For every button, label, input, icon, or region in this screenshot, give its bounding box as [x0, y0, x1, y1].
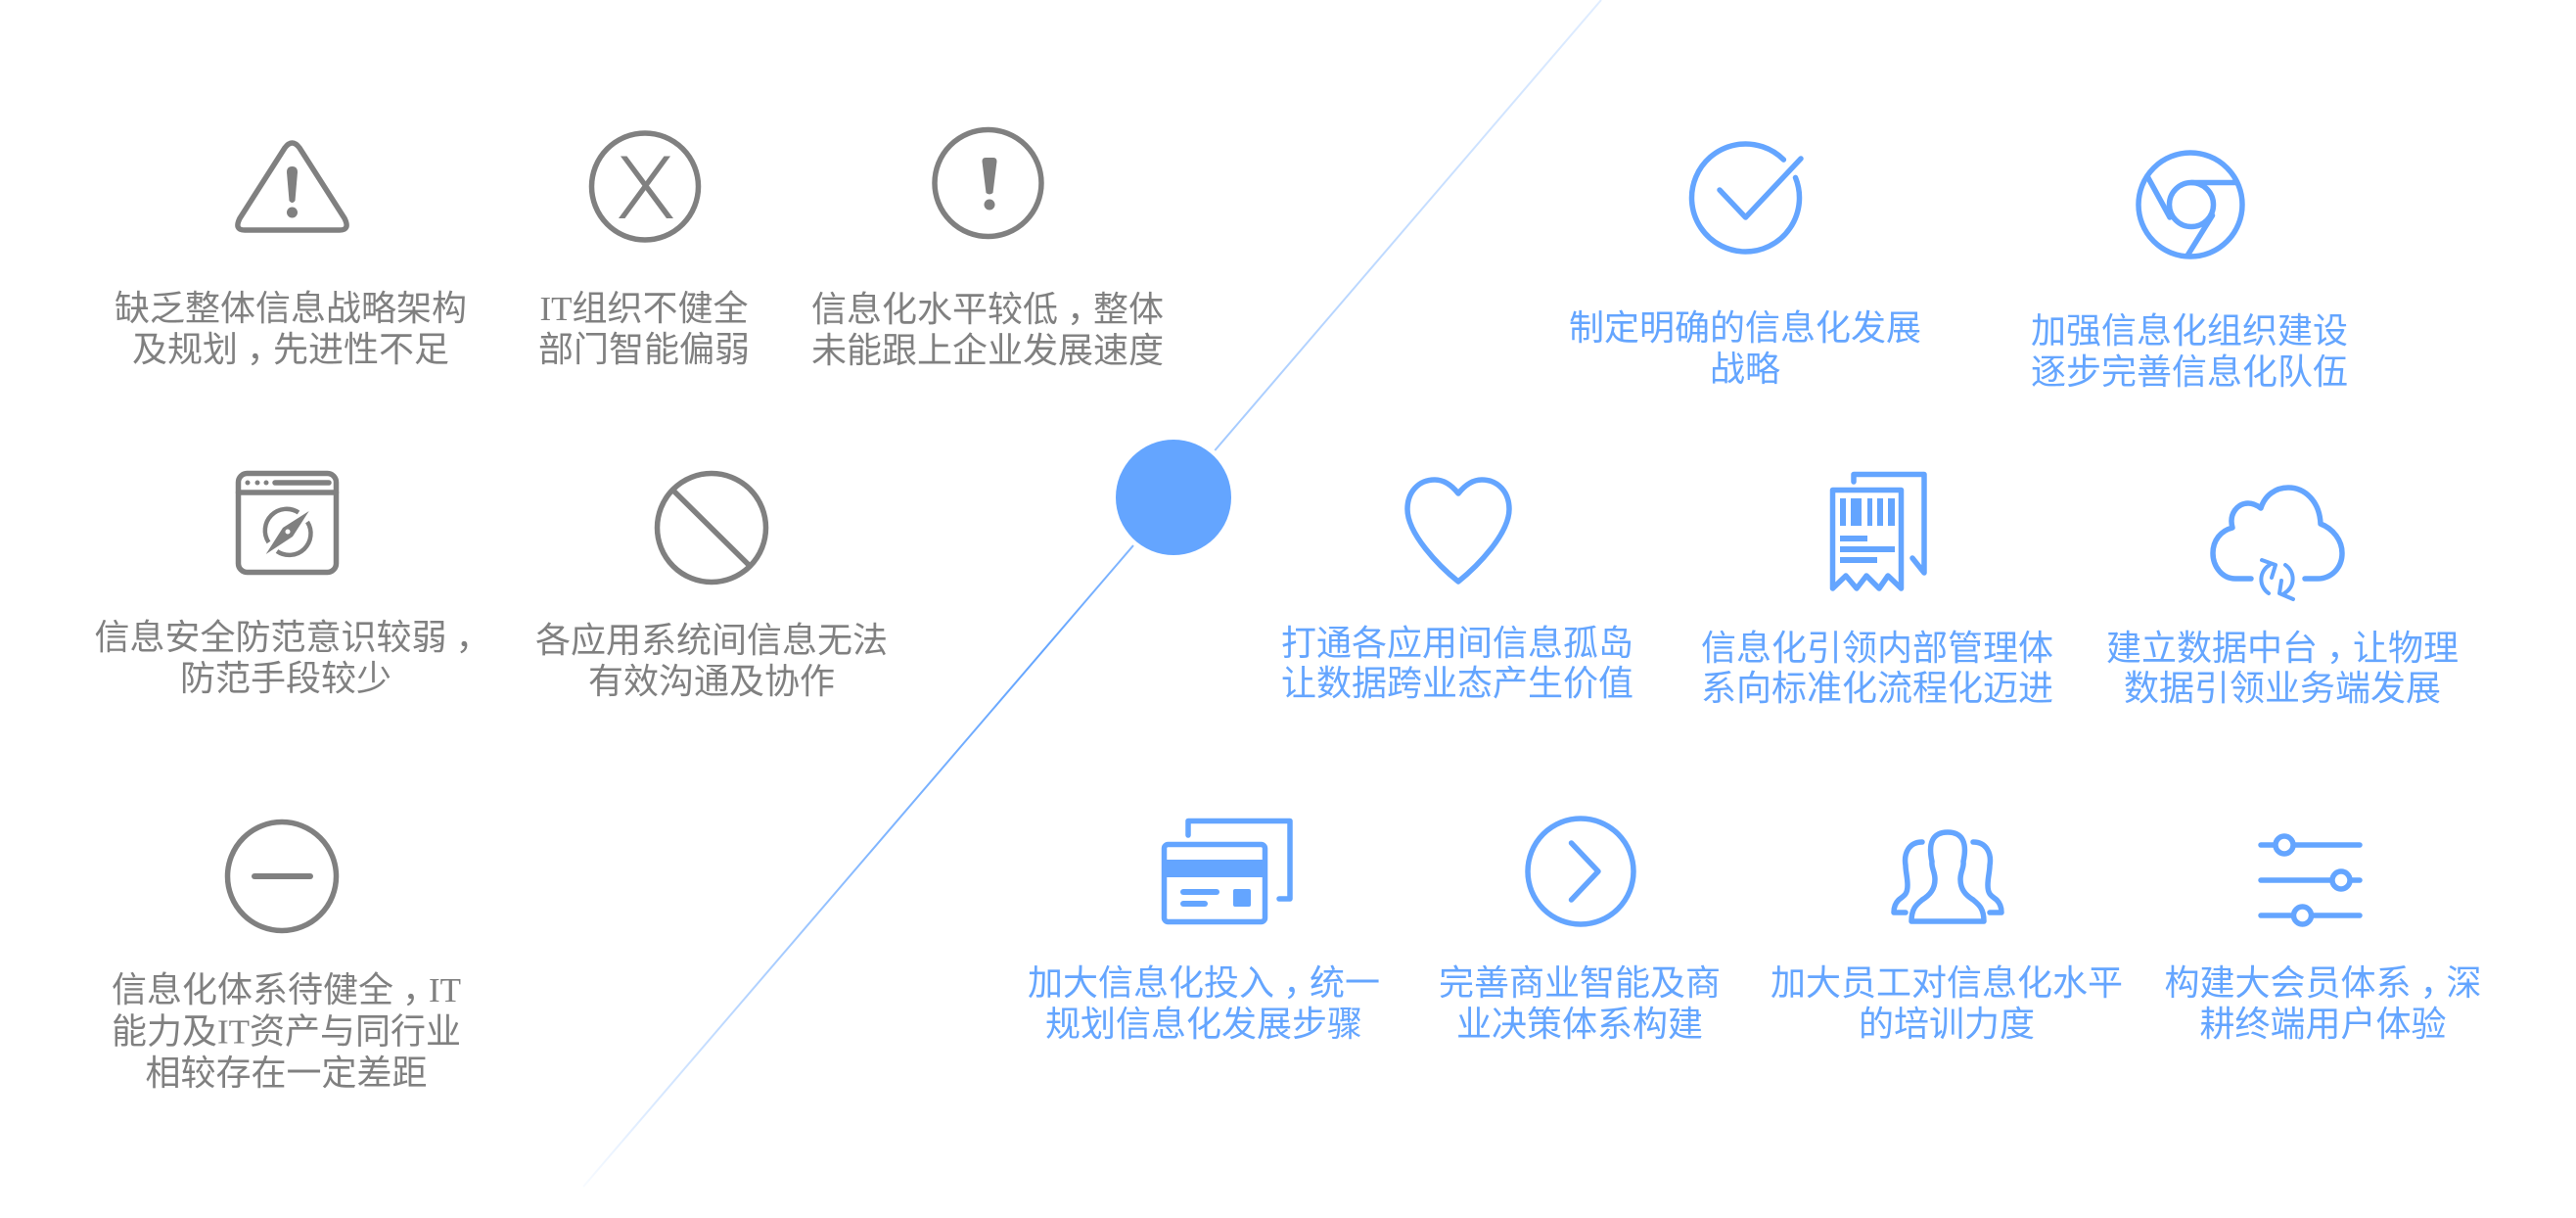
item: business intelligence [1439, 819, 1721, 1044]
icon: chrome-style ring [2139, 153, 2242, 257]
item: development strategy [1569, 144, 1921, 389]
item: investment [1028, 820, 1380, 1044]
item: organization building [2031, 153, 2348, 392]
text: development strategy: 制定明确的信息化发展 [1569, 307, 1921, 348]
text: data middle platform: 建立数据中台，让物理 [2106, 628, 2459, 668]
icon: cloud with refresh arrows [2213, 488, 2342, 599]
text: staff training: 加大员工对信息化水平 [1771, 962, 2123, 1003]
icon: credit cards [1164, 820, 1290, 922]
icon: sliders [2261, 836, 2360, 924]
icon: browser with compass [239, 474, 337, 572]
panel: current problems (left, grey) [94, 129, 1164, 1093]
text: application silos: 各应用系统间信息无法 [535, 620, 888, 660]
text: membership system: 耕终端用户体验 [2199, 1004, 2447, 1044]
icon: circle with exclamation mark [935, 129, 1041, 237]
text: information security: 防范手段较少 [180, 658, 391, 698]
text: investment: 规划信息化发展步骤 [1045, 1004, 1362, 1044]
text: IT capability gap: 信息化体系待健全，IT [112, 969, 461, 1009]
text: business intelligence: 业决策体系构建 [1456, 1004, 1703, 1044]
text: management standardization: 系向标准化流程化迈进 [1701, 668, 2053, 708]
text: strategy architecture: 缺乏整体信息战略架构 [115, 288, 467, 328]
text: IT capability gap: 相较存在一定差距 [145, 1053, 428, 1093]
icon: warning triangle [238, 143, 346, 230]
icon: heart [1407, 480, 1509, 582]
icon: chevron in circle [1528, 819, 1633, 924]
text: application silos: 有效沟通及协作 [588, 661, 835, 701]
item: membership system [2164, 836, 2482, 1044]
item: strategy architecture [115, 143, 467, 369]
item: application silos [535, 474, 888, 701]
icon: circle with minus [227, 822, 337, 930]
text: information security: 信息安全防范意识较弱， [94, 617, 491, 657]
text: IT organization: IT组织不健全 [539, 288, 749, 328]
text: management standardization: 信息化引领内部管理体 [1701, 628, 2053, 668]
panel: measures (right, blue) [1028, 144, 2482, 1044]
item: informatization level [811, 129, 1164, 370]
text: data middle platform: 数据引领业务端发展 [2124, 668, 2441, 708]
icon: people group [1894, 832, 2001, 921]
item: management standardization [1701, 474, 2053, 708]
icon: receipt [1832, 474, 1924, 588]
text: informatization level: 未能跟上企业发展速度 [811, 330, 1164, 370]
text: development strategy: 战略 [1710, 349, 1780, 389]
center circle node [1111, 435, 1236, 560]
text: investment: 加大信息化投入，统一 [1028, 962, 1380, 1003]
text: organization building: 逐步完善信息化队伍 [2031, 351, 2348, 392]
item: IT capability gap [112, 822, 461, 1093]
text: IT organization: 部门智能偏弱 [538, 329, 750, 369]
item: staff training [1771, 832, 2123, 1044]
icon: prohibited circle [658, 474, 765, 582]
text: membership system: 构建大会员体系，深 [2164, 962, 2482, 1003]
text: strategy architecture: 及规划，先进性不足 [132, 329, 449, 369]
text: organization building: 加强信息化组织建设 [2031, 310, 2348, 351]
icon: circle with X [591, 133, 699, 240]
text: IT capability gap: 能力及IT资产与同行业 [112, 1010, 461, 1052]
item: information security [94, 474, 491, 698]
item: data middle platform [2106, 488, 2459, 708]
item: break information silos [1281, 480, 1633, 703]
diagonal divider line [583, 0, 1601, 1187]
text: break information silos: 打通各应用间信息孤岛 [1281, 623, 1633, 663]
text: business intelligence: 完善商业智能及商 [1439, 962, 1721, 1003]
text: break information silos: 让数据跨业态产生价值 [1281, 663, 1633, 703]
icon: check in circle [1691, 144, 1801, 252]
text: informatization level: 信息化水平较低，整体 [811, 289, 1164, 329]
item: IT organization [538, 133, 750, 369]
text: staff training: 的培训力度 [1859, 1004, 2035, 1044]
